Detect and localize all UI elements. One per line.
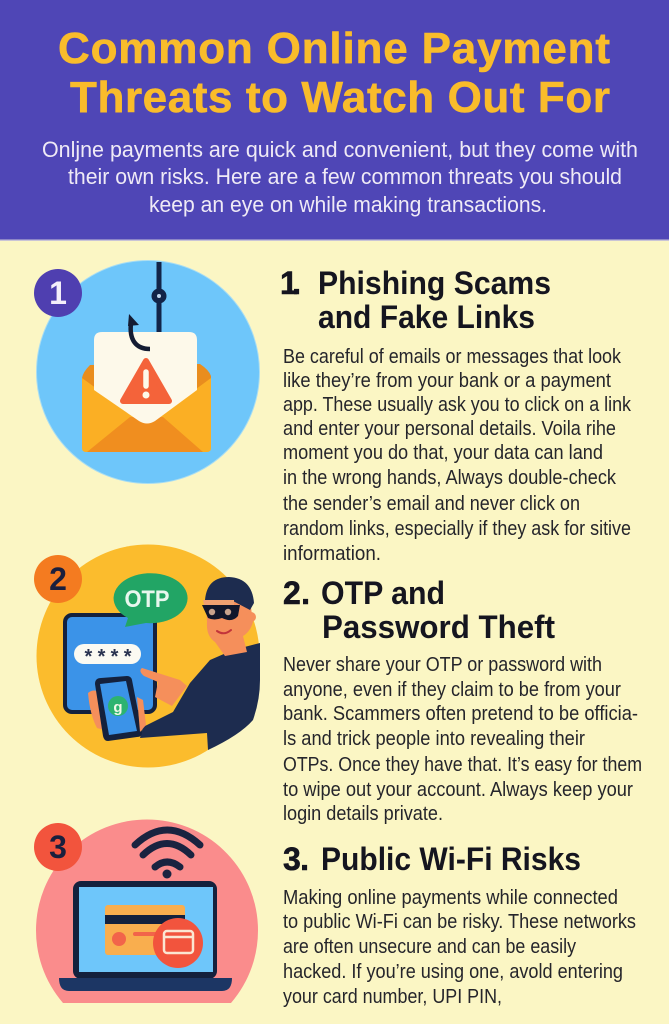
text: phishing description: information. (283, 543, 381, 565)
title: Threats to Watch Out For (70, 73, 610, 122)
text: OTP description: anyone, even if they claim to be from your (283, 679, 621, 701)
text: phishing description: the sender’s email and never click on (283, 493, 580, 515)
intro text: Onljne payments are quick and convenient, but they come with (42, 137, 638, 162)
text: Wi-Fi description: to public Wi-Fi can be risky. These networks (283, 911, 636, 933)
icon: thief with OTP (36, 544, 260, 768)
heading: phishing scams: and Fake Links (318, 299, 535, 335)
text: Wi-Fi description: Making online payments while connected (283, 887, 618, 909)
text: Wi-Fi description: are often unsecure and can be easily (283, 936, 576, 958)
text: Wi-Fi description (283, 887, 636, 1008)
title: Common Online Payment (58, 24, 610, 73)
heading: OTP and password theft: 2. (283, 575, 310, 611)
text: OTP description: Never share your OTP or password with (283, 654, 602, 676)
panel: OTP and password theft (34, 544, 642, 825)
icon: thief with OTP: **** (84, 646, 132, 668)
intro text: their own risks. Here are a few common threats you should (68, 164, 622, 189)
icon: thief with OTP: g (113, 699, 123, 716)
heading: OTP and password theft: Password Theft (322, 609, 555, 645)
heading: OTP and password theft (283, 575, 555, 645)
panel: public Wi-Fi risks (34, 819, 636, 1008)
text: Wi-Fi description: your card number, UPI PIN, (283, 986, 502, 1008)
text: phishing description: app. These usually ask you to click on a link (283, 394, 632, 416)
badge: number 3 (34, 823, 82, 871)
heading: phishing scams: 1. (280, 265, 301, 301)
heading: OTP and password theft: OTP and (321, 575, 445, 611)
text: Wi-Fi description: hacked. If you’re using one, avold entering (283, 961, 623, 983)
heading: public Wi-Fi risks: Public Wi-Fi Risks (321, 841, 581, 877)
panel: phishing scams (34, 260, 632, 565)
intro text (42, 137, 638, 217)
text: phishing description (283, 346, 632, 565)
heading: public Wi-Fi risks: 3. (283, 841, 309, 877)
text: OTP description: to wipe out your account. Always keep your (283, 779, 633, 801)
title (58, 24, 610, 122)
text: OTP description: ls and trick people into revealing their (283, 728, 585, 750)
text: phishing description: random links, especially if they ask for sitive (283, 518, 631, 540)
heading: phishing scams (280, 265, 551, 335)
badge: number 1 (34, 269, 82, 317)
badge: number 2 (34, 555, 82, 603)
text: OTP description: bank. Scammers often pretend to be officia- (283, 703, 638, 725)
icon: laptop on public Wi-Fi (36, 819, 258, 1003)
text: phishing description: in the wrong hands, Always double-check (283, 467, 617, 489)
text: phishing description: like they’re from your bank or a payment (283, 370, 611, 392)
heading: phishing scams: Phishing Scams (318, 265, 551, 301)
text: phishing description: moment you do that, your data can land (283, 442, 603, 464)
text: phishing description: Be careful of emails or messages that look (283, 346, 622, 368)
icon: phishing email (36, 260, 260, 484)
intro text: keep an eye on while making transactions. (149, 192, 547, 217)
text: phishing description: and enter your personal details. Voila rihe (283, 418, 616, 440)
badge: number 3: 3 (49, 829, 67, 865)
text: OTP description (283, 654, 642, 825)
badge: number 2: 2 (49, 561, 67, 597)
header banner (0, 0, 669, 241)
icon: thief with OTP: OTP (124, 586, 170, 613)
badge: number 1: 1 (49, 275, 67, 311)
text: OTP description: login details private. (283, 803, 443, 825)
